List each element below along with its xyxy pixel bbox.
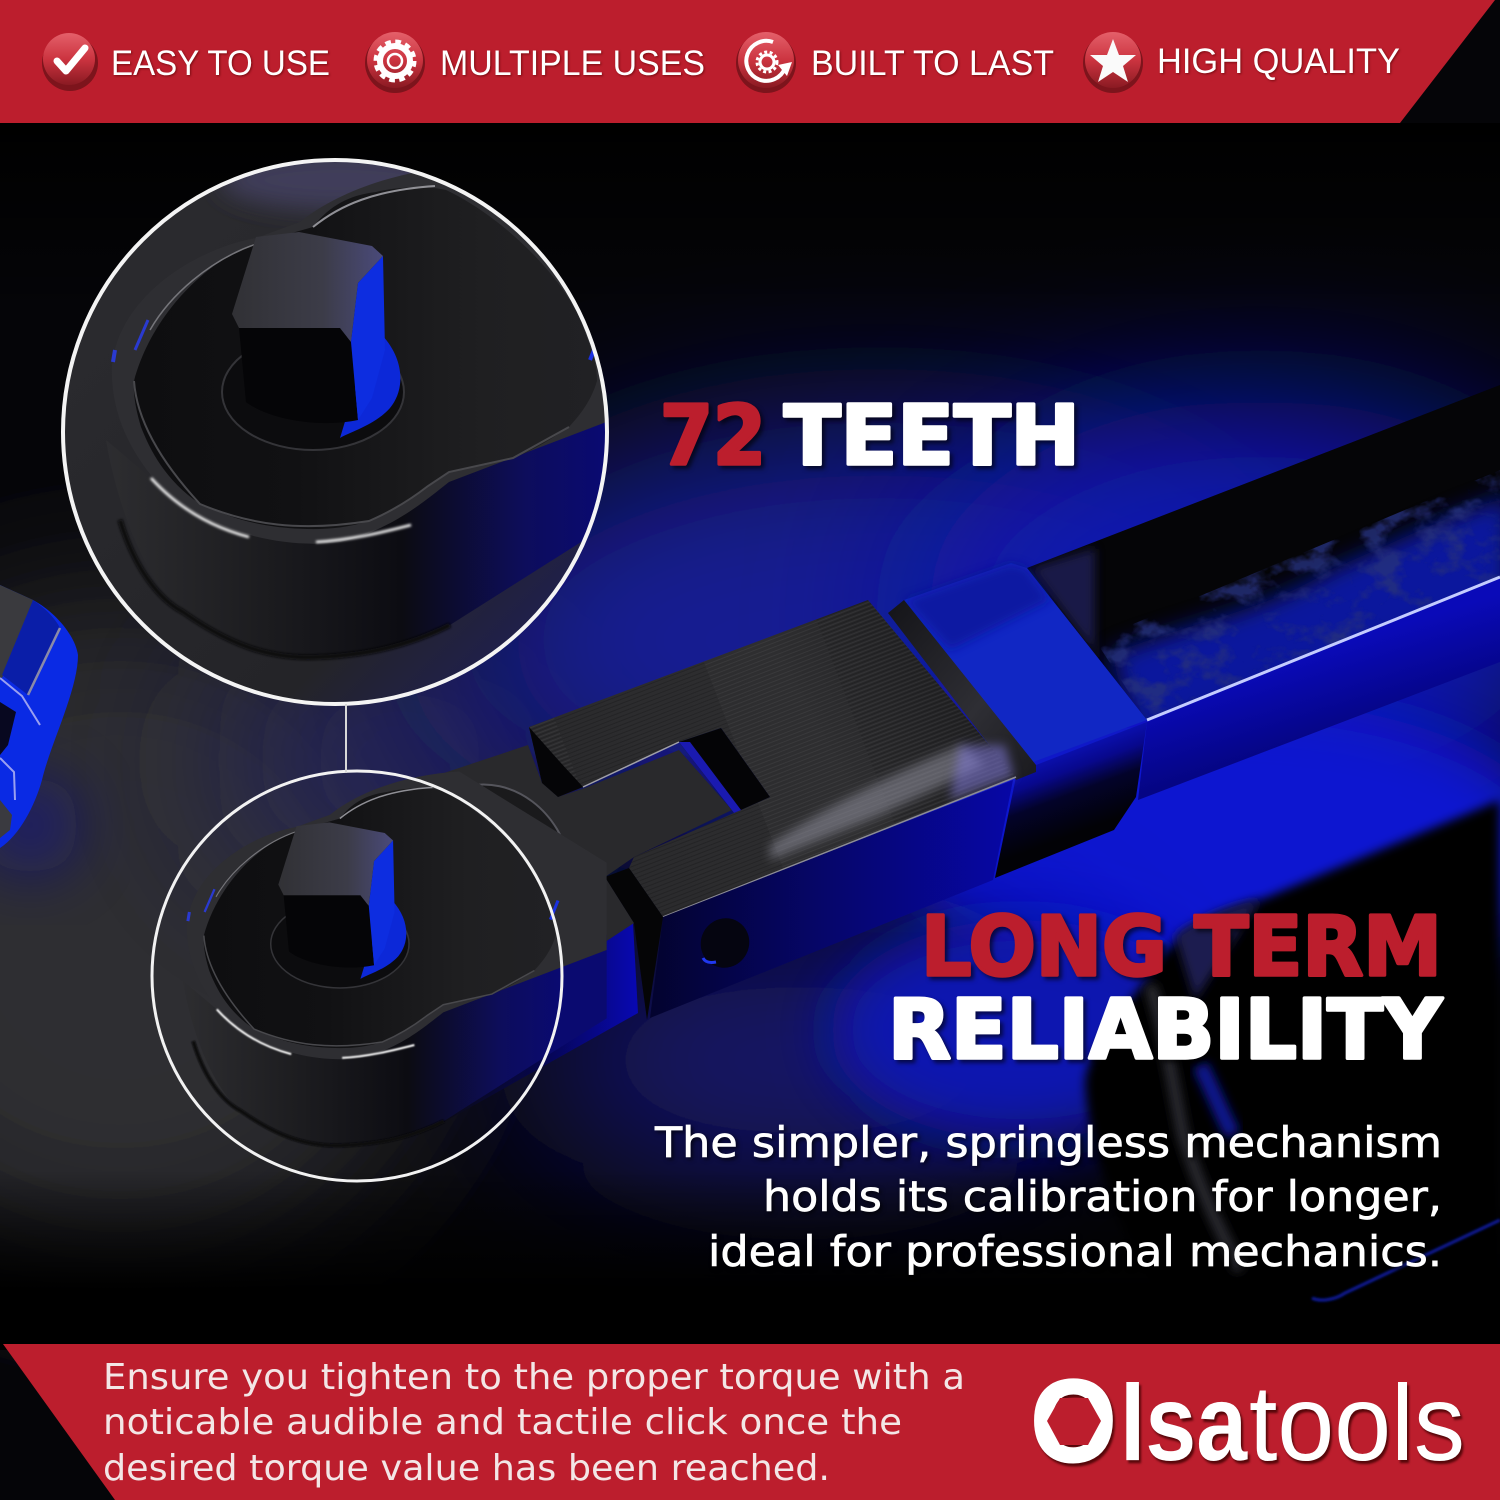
- wrench handle: [1027, 385, 1500, 800]
- blue sleeve collar: [888, 563, 1147, 878]
- body text: [654, 1118, 1442, 1276]
- wrench body: brushed top face with slot: [529, 600, 1016, 1020]
- heading: long term reliability: LONG TERM: [921, 900, 1442, 995]
- pivot hole: [692, 909, 758, 977]
- top banner: [0, 0, 1495, 123]
- icon: gear badge: [365, 32, 425, 93]
- bottom description text: Ensure you tighten to the proper torque with a: [103, 1357, 965, 1398]
- icon: cycle gear badge: [736, 32, 796, 93]
- label: easy to use: EASY TO USE: [111, 44, 330, 83]
- bottom description text: noticable audible and tactile click once the: [103, 1402, 902, 1443]
- label: multiple uses: MULTIPLE USES: [440, 44, 705, 83]
- body text: The simpler, springless mechanism: [654, 1118, 1442, 1167]
- body text: holds its calibration for longer,: [763, 1172, 1442, 1221]
- logo: Olsatools: [1031, 1356, 1465, 1486]
- wrench neck below the small circle: [386, 745, 732, 1130]
- heading: 72 teeth: TEETH: [784, 389, 1080, 484]
- label: high quality: HIGH QUALITY: [1157, 42, 1400, 81]
- heading: long term reliability: [888, 900, 1444, 1078]
- dark object lower right: [1085, 800, 1500, 1345]
- body text: ideal for professional mechanics.: [708, 1227, 1442, 1276]
- large circle: zoomed ratchet head: [63, 150, 664, 704]
- connector line between circles: [345, 704, 347, 773]
- logo: Olsatools: tools: [1249, 1362, 1465, 1483]
- small ratchet head detail: [183, 771, 607, 1146]
- socket at left edge: [0, 585, 80, 875]
- icon: star badge: [1083, 32, 1143, 93]
- label: built to last: BUILT TO LAST: [811, 44, 1054, 83]
- heading: long term reliability: RELIABILITY: [888, 983, 1444, 1078]
- bottom description text: [103, 1357, 965, 1489]
- logo: Olsatools: O: [1031, 1356, 1116, 1486]
- logo: Olsatools: lsa: [1120, 1362, 1248, 1483]
- bottom description text: desired torque value has been reached.: [103, 1448, 830, 1489]
- heading: 72 teeth: [660, 389, 1080, 484]
- small circle outline: [152, 771, 562, 1181]
- icon: check mark badge: [42, 33, 98, 91]
- bottom banner: [3, 1344, 1500, 1500]
- heading: 72 teeth: 72: [660, 389, 766, 484]
